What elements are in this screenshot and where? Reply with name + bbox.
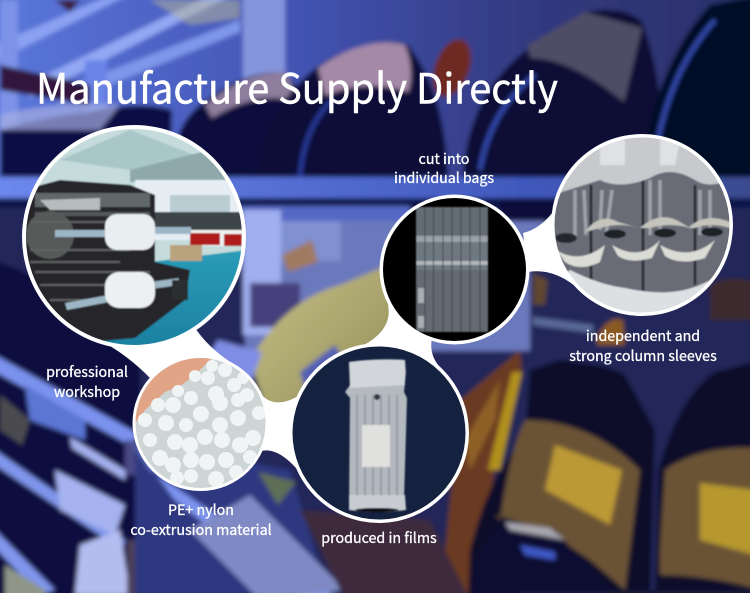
bottom right bottles: [468, 360, 655, 599]
air column bag: [345, 359, 407, 512]
caption: independent and strong column sleeves: strong column sleeves: [569, 345, 717, 366]
photo circle: PE+ nylon pellets: [132, 358, 266, 491]
rack post: [243, 0, 285, 85]
caption: PE+ nylon co-extrusion material: PE+ nylon: [168, 499, 234, 520]
flat bag: [416, 207, 488, 332]
caption: cut into individual bags: individual bags: [394, 167, 494, 188]
caption: professional workshop: professional: [46, 361, 128, 382]
caption: professional workshop: workshop: [54, 381, 120, 402]
top bottles: [0, 0, 750, 190]
white strip at bottom edge: [0, 593, 750, 599]
title: Manufacture Supply Directly: [36, 56, 558, 116]
sleeve vertical folds: [575, 180, 710, 240]
mid wall: [245, 221, 545, 351]
photo circle: film air column product: [289, 343, 469, 523]
dark oval slots: [555, 233, 577, 243]
top left rails: [0, 0, 240, 130]
left lower area: [0, 260, 140, 599]
red capsule: [426, 34, 478, 102]
photo circle: cut individual bag: [380, 194, 530, 346]
center lower: [135, 440, 330, 599]
yellow bottle: [250, 260, 400, 420]
caption: cut into individual bags: cut into: [419, 148, 469, 169]
orange bottle middle: [440, 350, 522, 599]
caption: PE+ nylon co-extrusion material: co-extrusion material: [130, 519, 272, 540]
white connector shapes between circles: [90, 208, 575, 468]
photo circle: column sleeves close-up: [551, 134, 733, 320]
caption: independent and strong column sleeves: independent and: [586, 325, 700, 346]
photo circle: professional workshop: [22, 125, 246, 350]
shelf rails: [0, 177, 750, 198]
caption: produced in films: produced in films: [321, 527, 437, 548]
